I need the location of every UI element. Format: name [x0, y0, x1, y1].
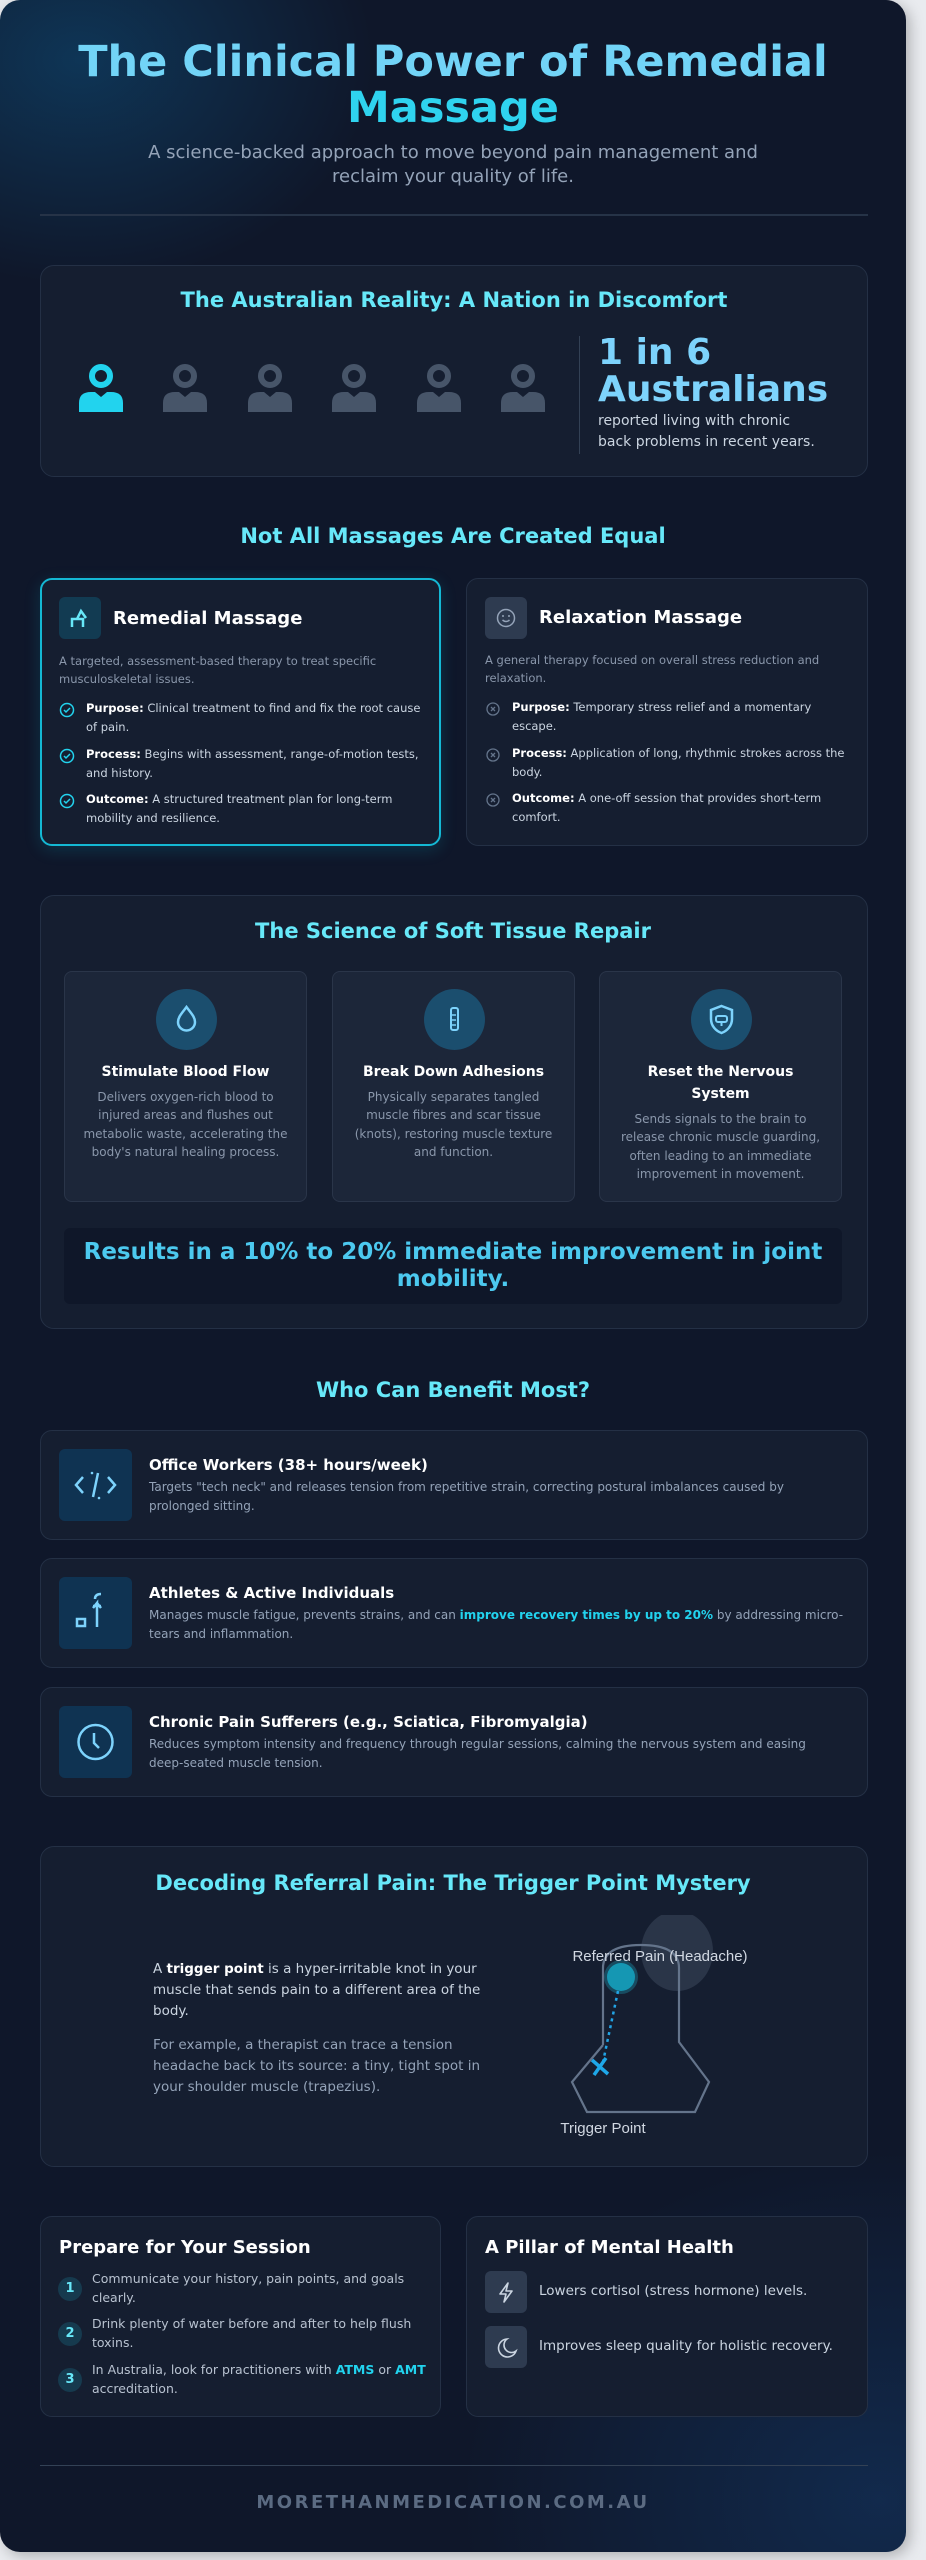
card: relaxation massage: A general therapy focused on overall stress reduction and relaxation. [485, 653, 819, 685]
heading: science: The Science of Soft Tissue Repair [255, 919, 651, 943]
title: Massage [347, 83, 559, 133]
card: remedial massage: Remedial Massage [113, 608, 302, 629]
card: office workers: Targets "tech neck" and releases tension from repetitive strain, correcting postural imbalances caused by prolonged sitting. [149, 1480, 784, 1512]
science card: adhesions: Physically separates tangled muscle fibres and scar tissue (knots), restoring muscle texture and function. [355, 1090, 552, 1159]
panel: prepare for session [40, 2216, 441, 2417]
list: remedial points: Process: Begins with assessment, range-of-motion tests, and history. [86, 747, 419, 780]
icon: moon [485, 2326, 527, 2368]
icon: ruler [424, 989, 485, 1050]
card: relaxation massage: Relaxation Massage [539, 607, 742, 628]
card: chronic pain: Chronic Pain Sufferers (e.g., Sciatica, Fibromyalgia) [149, 1713, 588, 1731]
card: chronic pain [40, 1687, 868, 1797]
panel: mental health: Lowers cortisol (stress hormone) levels. [539, 2283, 807, 2299]
stat: 1 in 6 australians [598, 332, 828, 450]
list: prepare steps: 1 [65, 2281, 75, 2296]
icon: athlete [59, 1577, 132, 1649]
icon row: 1 in 6 people [79, 364, 545, 412]
science card: nervous system: System [691, 1086, 750, 1102]
list: prepare steps: Drink plenty of water before and after to help flush toxins. [92, 2316, 411, 2350]
icon: shield [691, 989, 752, 1050]
panel: mental health: A Pillar of Mental Health [485, 2237, 734, 2258]
icon: code [59, 1449, 132, 1521]
list: prepare steps: Communicate your history, pain points, and goals clearly. [92, 2271, 404, 2304]
subtitle: reclaim your quality of life. [332, 166, 574, 187]
list: prepare steps: In Australia, look for practitioners with ATMS or AMT accreditation. [92, 2362, 426, 2396]
title [78, 37, 828, 133]
stat: 1 in 6 australians: Australians [598, 369, 828, 410]
list: prepare steps [58, 2271, 426, 2396]
science card: blood flow: Delivers oxygen-rich blood to injured areas and flushes out metabolic waste, accelerating the body's natural healing process. [83, 1090, 288, 1159]
list: relaxation points: Purpose: Temporary stress relief and a momentary escape. [512, 700, 811, 732]
science card: blood flow: Stimulate Blood Flow [102, 1064, 269, 1080]
heading: who can benefit: Who Can Benefit Most? [316, 1378, 590, 1402]
stat: 1 in 6 australians: back problems in recent years. [598, 434, 815, 450]
list: remedial points: Purpose: Clinical treatment to find and fix the root cause of pain. [86, 701, 420, 734]
heading: trigger point: Decoding Referral Pain: The Trigger Point Mystery [155, 1871, 751, 1895]
text: trigger point explanation: A trigger point is a hyper-irritable knot in your muscle that sends pain to a different area of the body. [153, 1961, 480, 2019]
panel: science of soft tissue repair [40, 895, 868, 1329]
panel: mental health: Improves sleep quality for holistic recovery. [539, 2338, 833, 2354]
card: office workers [40, 1430, 868, 1540]
card: remedial massage [40, 578, 441, 846]
science card: adhesions: Break Down Adhesions [363, 1064, 544, 1080]
icon: drop [156, 989, 217, 1050]
icon: smiley [485, 597, 527, 639]
heading: australian reality: The Australian Reality: A Nation in Discomfort [181, 288, 727, 312]
list: prepare steps: 2 [65, 2326, 75, 2341]
icon: clock [59, 1706, 132, 1778]
list: remedial points: Outcome: A structured treatment plan for long-term mobility and resilience. [86, 792, 392, 824]
subtitle [148, 142, 758, 187]
list: prepare steps: 3 [65, 2372, 75, 2387]
card: athletes: Athletes & Active Individuals [149, 1584, 394, 1602]
list: relaxation points [486, 700, 845, 824]
panel: prepare for session: Prepare for Your Session [59, 2237, 311, 2258]
card: office workers: Office Workers (38+ hours/week) [149, 1456, 428, 1474]
science card: nervous system: Reset the Nervous [648, 1064, 793, 1080]
card: athletes [40, 1558, 868, 1668]
callout: results [64, 1228, 842, 1304]
list: relaxation points: Process: Application of long, rhythmic strokes across the body. [512, 746, 845, 778]
icon: bolt [485, 2271, 527, 2313]
card: relaxation massage [466, 578, 868, 846]
heading: not all massages: Not All Massages Are Created Equal [240, 524, 666, 548]
panel: mental health [466, 2216, 868, 2417]
panel: australian reality [40, 265, 868, 477]
icon: remedial [59, 597, 101, 639]
card: athletes: Manages muscle fatigue, prevents strains, and can improve recovery times by up to 20% by addressing micro-tears and inflammation. [149, 1608, 843, 1640]
text: trigger point explanation: For example, a therapist can trace a tension headache back to its source: a tiny, tight spot in your shoulder muscle (trapezius). [153, 2037, 480, 2095]
subtitle: A science-backed approach to move beyond pain management and [148, 142, 758, 163]
panel: trigger point [40, 1846, 868, 2167]
text: trigger point explanation [153, 1961, 480, 2095]
science card: adhesions [332, 971, 575, 1202]
diagram: referral pain [560, 1915, 748, 2137]
diagram: referral pain: Referred Pain (Headache) [572, 1948, 748, 1965]
title: The Clinical Power of Remedial [78, 37, 828, 87]
list: relaxation points: Outcome: A one-off session that provides short-term comfort. [512, 791, 821, 824]
footer: MORETHANMEDICATION.COM.AU [256, 2492, 650, 2513]
science card: nervous system [599, 971, 842, 1202]
list: remedial points [60, 701, 420, 824]
stat: 1 in 6 australians: 1 in 6 [598, 332, 711, 373]
card: chronic pain: Reduces symptom intensity and frequency through regular sessions, calming the nervous system and easing deep-seated muscle tension. [149, 1737, 806, 1770]
science card: nervous system: Sends signals to the brain to release chronic muscle guarding, often leading to an immediate improvement in movement. [621, 1112, 820, 1181]
stat: 1 in 6 australians: reported living with chronic [598, 413, 790, 429]
diagram: referral pain: Trigger Point [560, 2120, 646, 2137]
science card: blood flow [64, 971, 307, 1202]
card: remedial massage: A targeted, assessment-based therapy to treat specific musculoskeletal issues. [59, 654, 376, 686]
callout: results: Results in a 10% to 20% immediate improvement in joint mobility. [84, 1239, 822, 1292]
